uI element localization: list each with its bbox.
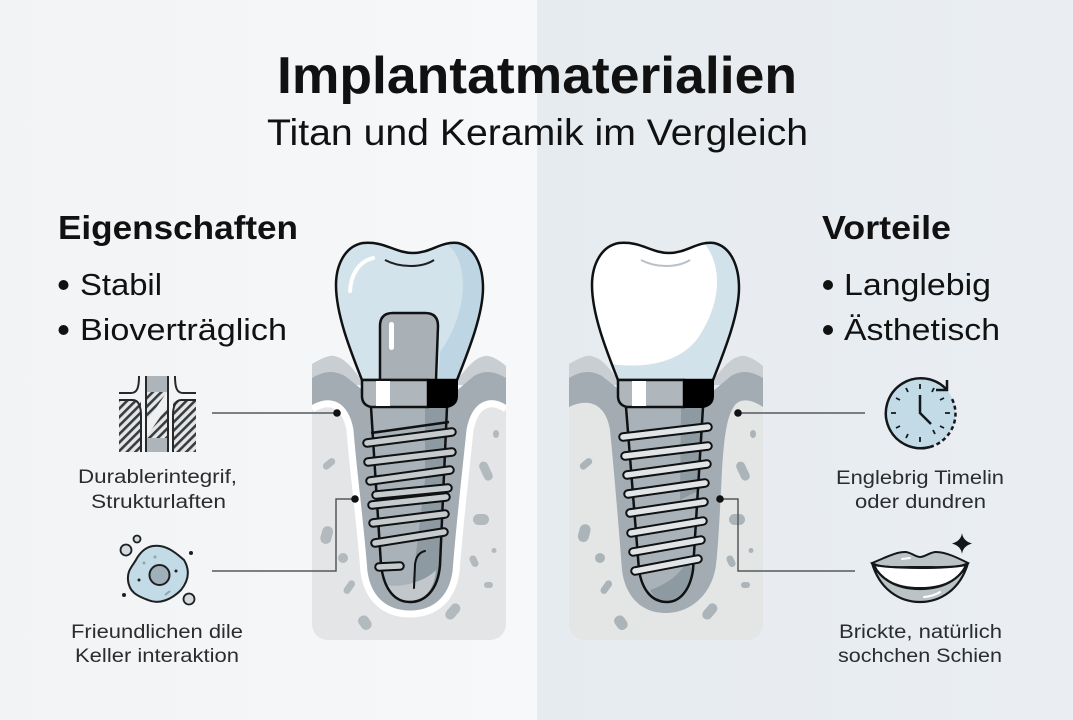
caption: cell interaction: [71, 622, 243, 667]
caption: durability: Strukturlaften: [91, 492, 226, 513]
caption: natural look: Brickte, natürlich: [839, 622, 1002, 643]
implant body: ceramic: [626, 407, 703, 602]
caption: lifetime: Englebrig Timelin: [836, 468, 1004, 489]
caption: lifetime: [836, 468, 1004, 513]
connector: durability to implant: [212, 409, 341, 417]
panel: right background: [537, 0, 1073, 720]
bone and gum: ceramic: [569, 356, 763, 640]
icon: clock: [886, 378, 956, 448]
heading: Eigenschaften: Eigenschaften: [58, 209, 298, 246]
threads: ceramic: [623, 427, 708, 571]
threads: titanium: [367, 432, 452, 588]
heading: Vorteile: Vorteile: [822, 209, 951, 246]
collar: ceramic: [618, 380, 713, 407]
bone and gum: titanium: [312, 356, 506, 640]
caption: durability: [78, 467, 237, 513]
crown: titanium: [336, 243, 483, 380]
title: Implantatmaterialien: [277, 47, 797, 105]
diagram: titanium implant: [312, 243, 506, 640]
caption: durability: Durablerintegrif,: [78, 467, 237, 488]
diagram: ceramic implant: [569, 243, 763, 640]
list: Eigenschaften: Bioverträglich: [80, 312, 287, 347]
list: Eigenschaften: Stabil: [80, 267, 162, 302]
connector: cell interaction to implant: [212, 495, 359, 571]
subtitle: Titan und Keramik im Vergleich: [267, 112, 808, 153]
icon: structural cross-section: [119, 376, 196, 452]
implant body: titanium: [370, 407, 449, 602]
list: Eigenschaften: [58, 267, 287, 347]
caption: natural look: sochchen Schien: [838, 646, 1002, 667]
connector: clock to implant: [734, 409, 865, 417]
caption: cell interaction: Keller interaktion: [75, 646, 239, 667]
icon: smile: [872, 533, 972, 602]
bone particles: ceramic: [577, 430, 756, 632]
bone particles: titanium: [319, 430, 499, 632]
panel: left background: [0, 0, 537, 720]
abutment: titanium: [380, 313, 438, 380]
caption: lifetime: oder dundren: [855, 492, 986, 513]
caption: natural look: [838, 622, 1002, 667]
connector: lips to implant: [716, 495, 855, 571]
list: Vorteile: [823, 267, 1000, 347]
collar: titanium: [362, 380, 457, 407]
list: Vorteile: Ästhetisch: [844, 312, 1000, 347]
crown: ceramic: [592, 243, 739, 380]
icon: cell: [120, 536, 194, 604]
list: Vorteile: Langlebig: [844, 267, 991, 302]
caption: cell interaction: Frieundlichen dile: [71, 622, 243, 643]
